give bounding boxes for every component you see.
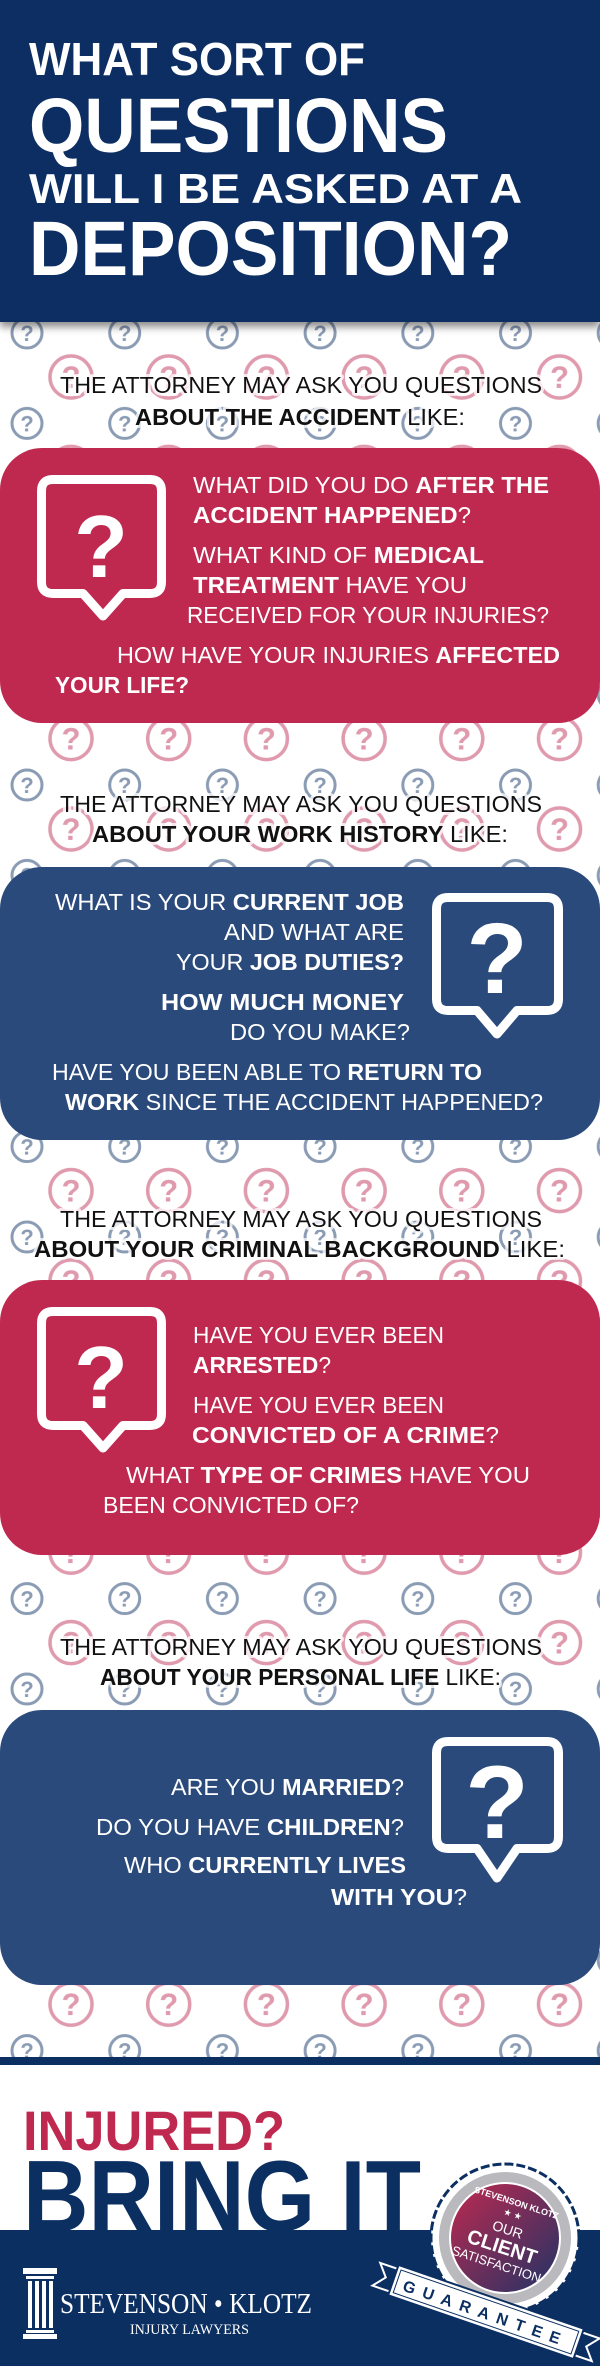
logo: [23, 2268, 312, 2339]
icon: question bubble: ?: [74, 1328, 128, 1427]
footer: [0, 2057, 600, 2366]
background question pattern: [0, 322, 600, 2062]
panel: personal life: [0, 1710, 600, 1985]
intro 2: [60, 791, 542, 847]
intro 4: [60, 1634, 542, 1690]
questions text: HOW HAVE YOUR INJURIES AFFECTED: [117, 642, 560, 668]
questions text: [96, 1774, 467, 1910]
icon: question bubble: [42, 1312, 162, 1448]
logo: STEVENSON • KLOTZ: [60, 2288, 312, 2320]
intro 3: ABOUT YOUR CRIMINAL BACKGROUND LIKE:: [34, 1236, 565, 1262]
ribbon: GUARANTEE: [400, 2278, 570, 2351]
tagline: INJURED?: [23, 2099, 285, 2162]
title: WHAT SORT OF: [29, 33, 365, 85]
questions text: HAVE YOU EVER BEEN: [193, 1322, 444, 1348]
tagline: [23, 2099, 421, 2253]
questions text: CONVICTED OF A CRIME ?: [192, 1422, 499, 1448]
questions text: WORK SINCE THE ACCIDENT HAPPENED?: [65, 1089, 543, 1115]
questions text: [103, 1322, 530, 1518]
intro 1: [60, 372, 542, 430]
badge: satisfaction guarantee: ★ ★: [502, 2207, 523, 2222]
tagline: BRING IT: [23, 2141, 421, 2253]
questions text: [52, 889, 543, 1115]
questions text: DO YOU MAKE?: [230, 1019, 410, 1045]
icon: pillar: [23, 2268, 57, 2339]
badge: satisfaction guarantee: CLIENT: [464, 2226, 540, 2269]
intro 4: THE ATTORNEY MAY ASK YOU QUESTIONS: [60, 1634, 542, 1660]
questions text: ARRESTED?: [193, 1352, 331, 1378]
questions text: TREATMENT HAVE YOU: [193, 572, 467, 598]
icon: question bubble: [436, 898, 558, 1034]
badge: satisfaction guarantee: SATISFACTION: [450, 2243, 543, 2286]
questions text: WHAT DID YOU DO AFTER THE: [193, 472, 549, 498]
title: DEPOSITION?: [29, 206, 512, 292]
questions text: BEEN CONVICTED OF?: [103, 1492, 359, 1518]
icon: question bubble: ?: [465, 1745, 529, 1861]
questions text: WITH YOU ?: [331, 1884, 467, 1910]
panel: work history: [0, 867, 600, 1140]
questions text: WHO CURRENTLY LIVES: [124, 1852, 406, 1878]
ribbon: [371, 2259, 600, 2365]
icon: question bubble: ?: [74, 497, 128, 596]
questions text: HAVE YOU BEEN ABLE TO RETURN TO: [52, 1059, 482, 1085]
questions text: DO YOU HAVE CHILDREN?: [96, 1814, 404, 1840]
questions text: ARE YOU MARRIED?: [171, 1774, 404, 1800]
questions text: AND WHAT ARE: [224, 919, 404, 945]
intro 1: ABOUT THE ACCIDENT LIKE:: [135, 404, 465, 430]
questions text: WHAT TYPE OF CRIMES HAVE YOU: [126, 1462, 530, 1488]
intro 4: ABOUT YOUR PERSONAL LIFE LIKE:: [100, 1664, 501, 1690]
title: QUESTIONS: [29, 83, 448, 169]
panel: accident: [0, 448, 600, 723]
intro 2: THE ATTORNEY MAY ASK YOU QUESTIONS: [60, 791, 542, 817]
intro 3: THE ATTORNEY MAY ASK YOU QUESTIONS: [60, 1206, 542, 1232]
intro 2: ABOUT YOUR WORK HISTORY LIKE:: [92, 821, 508, 847]
questions text: YOUR JOB DUTIES?: [176, 949, 404, 975]
title: WILL I BE ASKED AT A: [29, 165, 522, 212]
questions text: YOUR LIFE?: [55, 672, 189, 698]
header: [0, 0, 600, 322]
questions text: [55, 472, 560, 698]
badge: satisfaction guarantee: STEVENSON KLOTZ: [473, 2184, 560, 2221]
questions text: RECEIVED FOR YOUR INJURIES?: [187, 602, 549, 628]
logo: INJURY LAWYERS: [130, 2322, 249, 2338]
questions text: HAVE YOU EVER BEEN: [193, 1392, 444, 1418]
intro 3: [34, 1206, 565, 1262]
badge: satisfaction guarantee: OUR: [491, 2217, 525, 2242]
icon: question bubble: [436, 1742, 558, 1878]
icon: question bubble: [42, 480, 162, 616]
questions text: WHAT KIND OF MEDICAL: [193, 542, 484, 568]
questions text: HOW MUCH MONEY: [161, 989, 404, 1015]
icon: question bubble: ?: [466, 903, 528, 1015]
intro 1: THE ATTORNEY MAY ASK YOU QUESTIONS: [60, 372, 542, 398]
questions text: ACCIDENT HAPPENED ?: [193, 502, 471, 528]
panel: criminal background: [0, 1280, 600, 1555]
badge: satisfaction guarantee: [371, 2164, 600, 2365]
questions text: WHAT IS YOUR CURRENT JOB: [55, 889, 404, 915]
title: [29, 33, 522, 292]
